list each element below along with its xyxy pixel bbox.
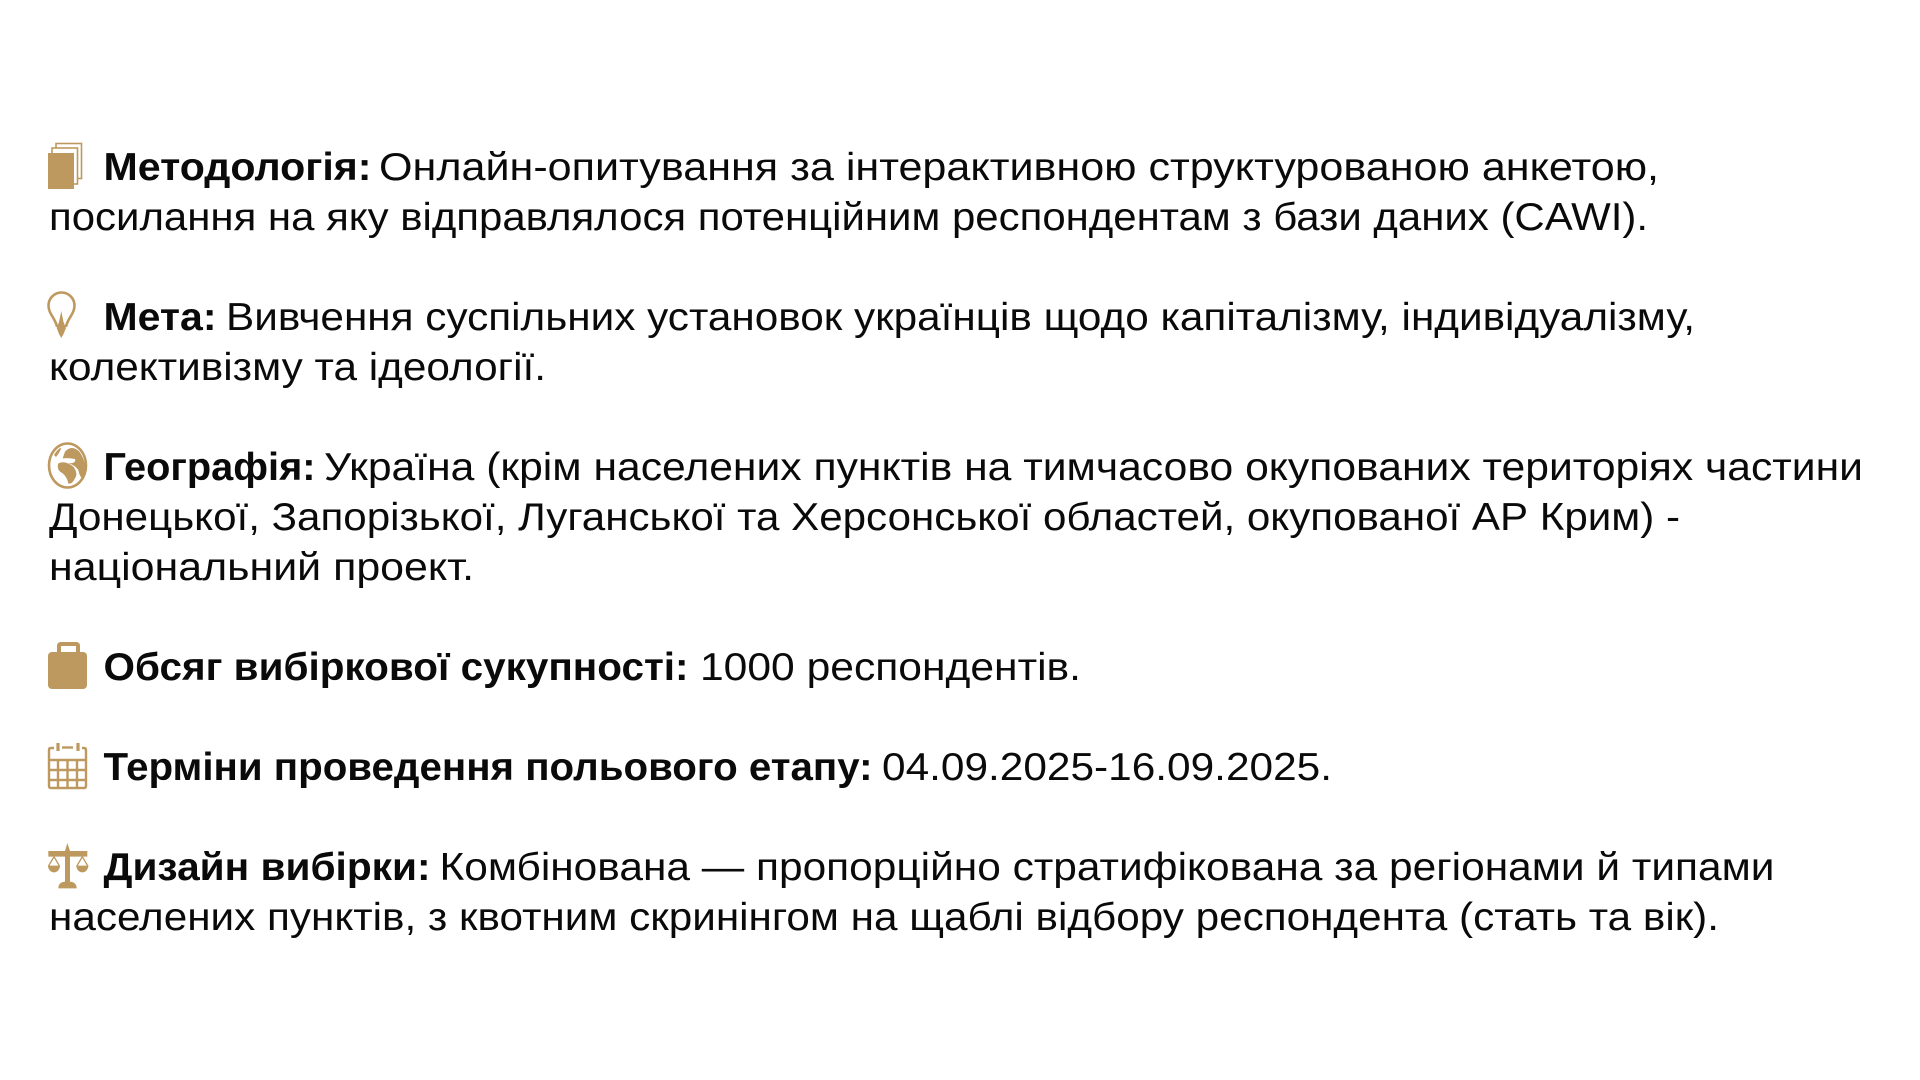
text: geography description: національний проект.: [49, 546, 474, 589]
icon: calendar: [49, 743, 86, 788]
heading: methodology: Методологія:: [104, 146, 372, 189]
icon: light bulb: [48, 292, 74, 338]
text: methodology description: Онлайн-опитування за інтерактивною структурованою анкетою,: [379, 146, 1659, 189]
text: geography description: Україна (крім населених пунктів на тимчасово окупованих територіях частини: [324, 446, 1863, 489]
heading: geography: Географія:: [104, 446, 316, 489]
text: sample design description: [49, 846, 1774, 939]
text: sample size value: 1000 респондентів.: [700, 646, 1081, 689]
heading: goal: Мета:: [104, 296, 216, 339]
panel: sample design: [48, 843, 1775, 939]
text: methodology description: посилання на яку відправлялося потенційним респондентам з бази даних (CAWI).: [49, 196, 1648, 239]
panel: goal: [48, 292, 1695, 389]
text: goal description: колективізму та ідеології.: [49, 346, 546, 389]
heading: sample design: Дизайн вибірки:: [104, 846, 430, 889]
text: fieldwork dates value: 04.09.2025-16.09.2025.: [882, 746, 1332, 789]
panel: methodology: [48, 144, 1659, 239]
icon: globe: [49, 444, 86, 488]
icon: scales: [48, 843, 88, 888]
text: geography description: Донецької, Запорізької, Луганської та Херсонської областей, окупованої АР Крим) -: [49, 496, 1680, 539]
panel: geography: [49, 444, 1863, 589]
heading: fieldwork dates: Терміни проведення польового етапу:: [104, 746, 872, 789]
text: goal description: [49, 296, 1695, 389]
text: geography description: [49, 446, 1863, 589]
text: sample design description: населених пунктів, з квотним скринінгом на щаблі відбору респондента (стать та вік).: [49, 896, 1719, 939]
panel: fieldwork dates: [49, 743, 1332, 789]
heading: sample size: Обсяг вибіркової сукупності:: [104, 646, 688, 689]
text: goal description: Вивчення суспільних установок українців щодо капіталізму, індивідуалізму,: [226, 296, 1695, 339]
icon: briefcase: [48, 644, 87, 689]
text: methodology description: [49, 146, 1659, 239]
text: sample design description: Комбінована — пропорційно стратифікована за регіонами й типами: [440, 846, 1774, 889]
icon: documents: [48, 144, 82, 189]
panel: sample size: [48, 644, 1081, 689]
